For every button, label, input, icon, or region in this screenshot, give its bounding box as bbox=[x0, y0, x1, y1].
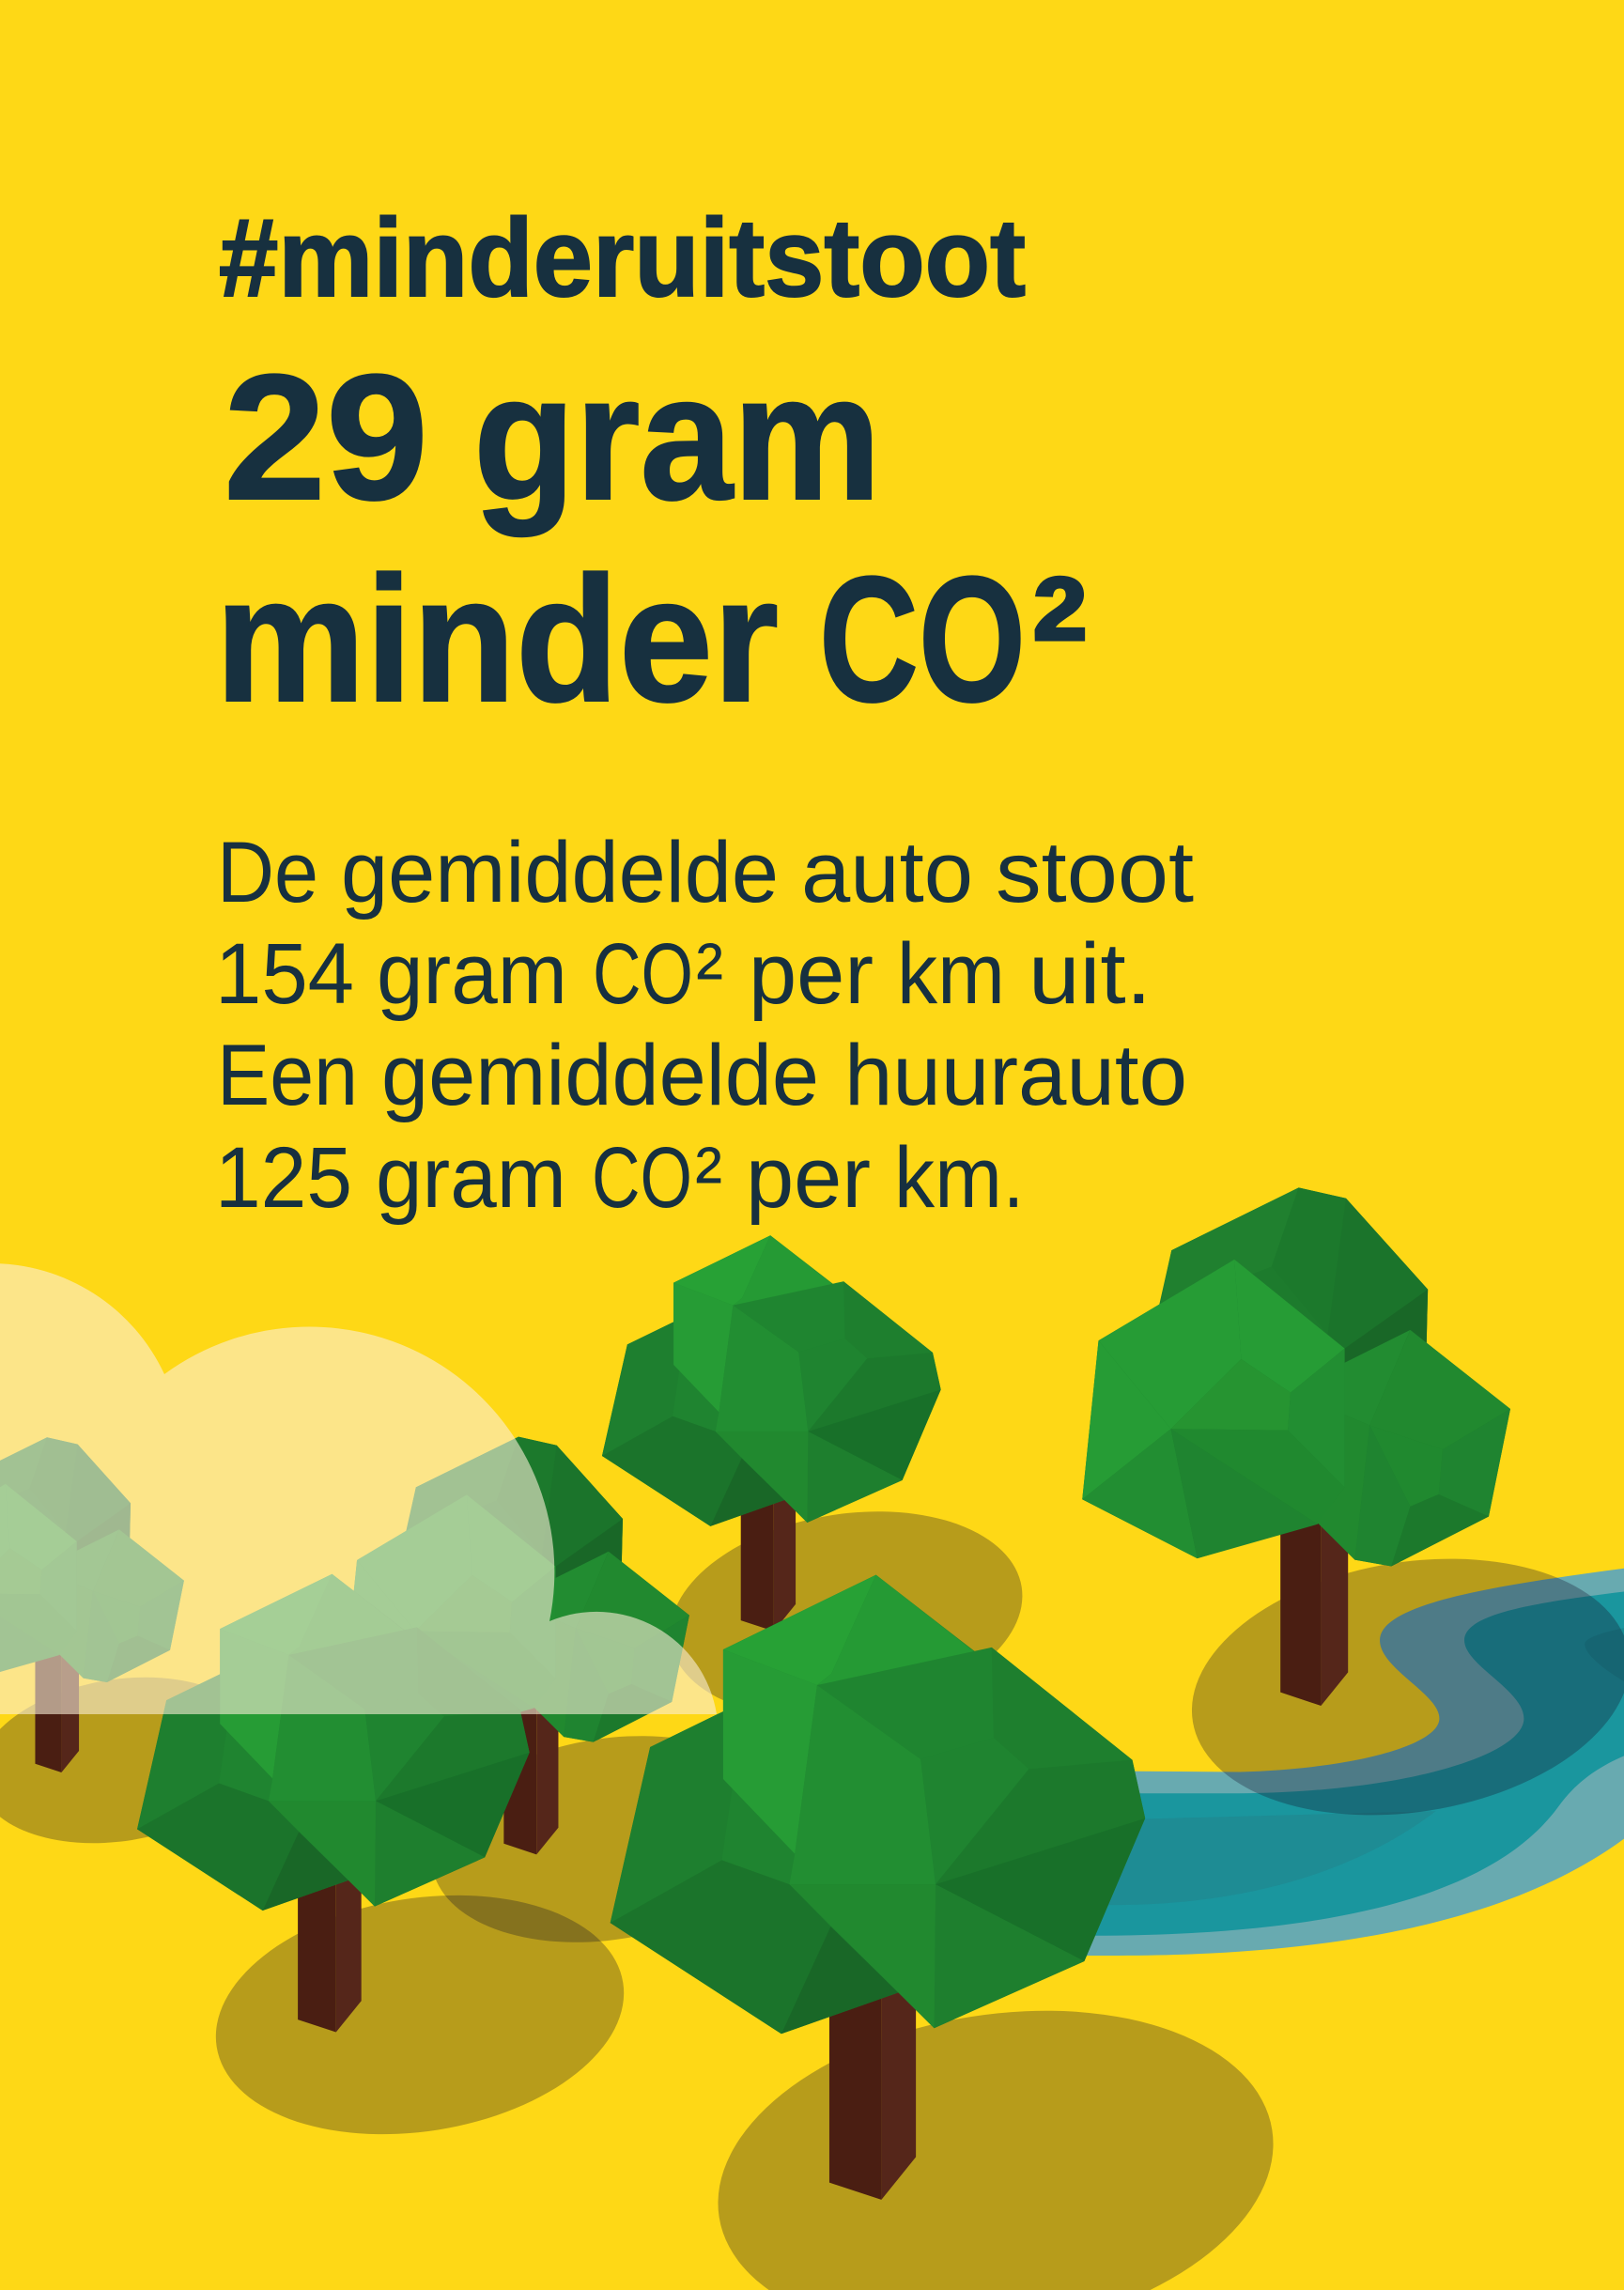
body text: gram bbox=[376, 1130, 566, 1226]
body text: huurauto bbox=[844, 1028, 1187, 1123]
body text: 154 bbox=[215, 926, 354, 1022]
body text: km bbox=[894, 1130, 1002, 1226]
body text: gemiddelde bbox=[341, 825, 779, 921]
body text: ² bbox=[696, 926, 723, 1022]
cloud bbox=[0, 1263, 717, 1714]
body text: km bbox=[897, 926, 1005, 1022]
body text: per bbox=[749, 926, 874, 1022]
river bbox=[1037, 1566, 1624, 1956]
body text: stoot bbox=[996, 825, 1194, 921]
main title: ² bbox=[1031, 540, 1088, 739]
body text: gram bbox=[377, 926, 567, 1022]
tree: middle left bbox=[137, 1574, 530, 2032]
tree: right bbox=[1082, 1187, 1510, 1706]
main title bbox=[215, 338, 1088, 739]
body text: CO bbox=[593, 926, 693, 1022]
body text: CO bbox=[592, 1130, 692, 1226]
main title: 29 bbox=[224, 338, 428, 537]
body text: Een bbox=[217, 1028, 358, 1123]
body text: uit. bbox=[1029, 926, 1152, 1022]
body text: De bbox=[217, 825, 318, 921]
body text bbox=[215, 825, 1194, 1226]
body text: gemiddelde bbox=[381, 1028, 819, 1123]
ground shadows bbox=[0, 1488, 1624, 2290]
tree: top middle bbox=[602, 1235, 941, 1632]
hashtag heading: #minderuitstoot bbox=[219, 196, 1026, 320]
body text: 125 bbox=[215, 1130, 352, 1226]
tree: back centre bbox=[344, 1437, 689, 1854]
main title: minder bbox=[215, 540, 779, 739]
body text: auto bbox=[801, 825, 973, 921]
body text: ² bbox=[695, 1130, 722, 1226]
tree: far left bbox=[0, 1437, 184, 1772]
tree: front large bbox=[611, 1575, 1145, 2200]
body text: . bbox=[1003, 1130, 1024, 1226]
main title: gram bbox=[473, 338, 881, 537]
main title: CO bbox=[819, 540, 1026, 739]
body text: per bbox=[746, 1130, 871, 1226]
